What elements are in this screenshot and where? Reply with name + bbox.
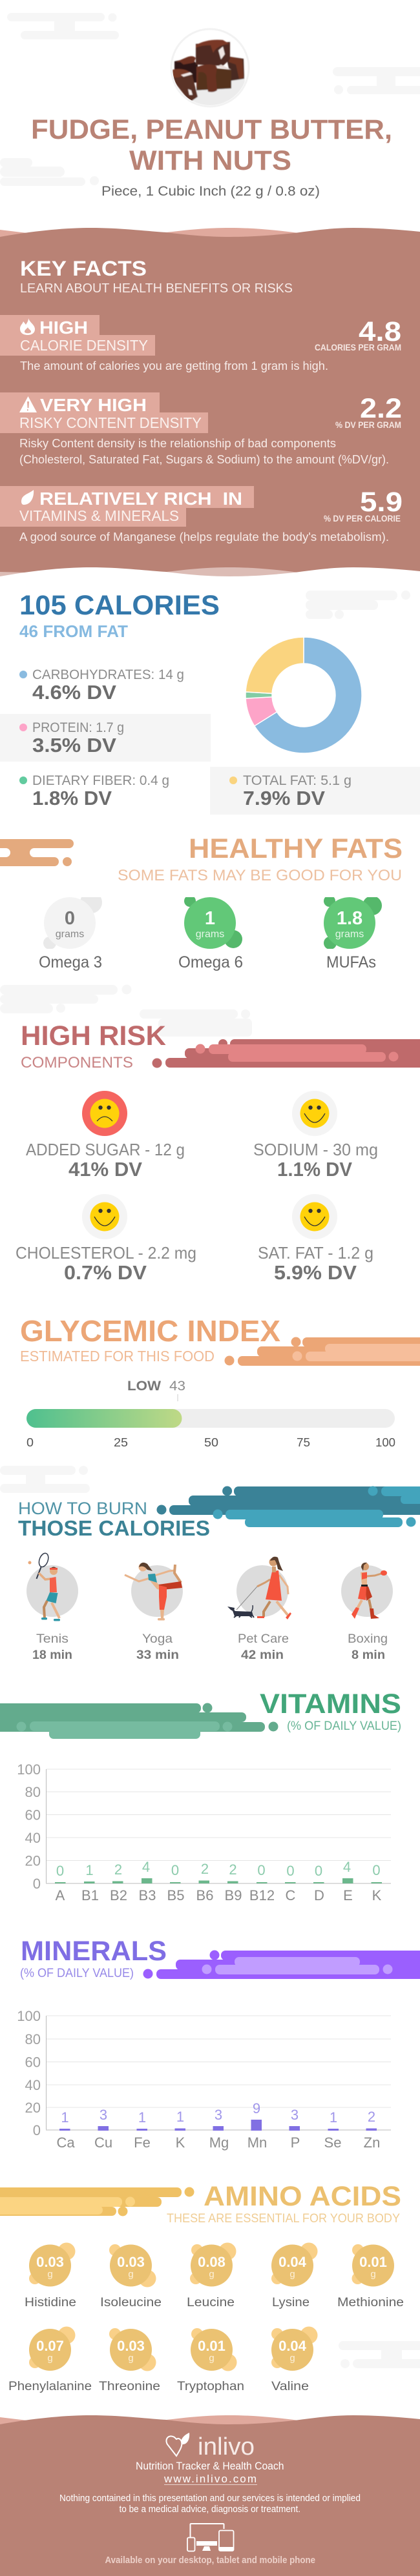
subheading: (% OF DAILY VALUE) [20,1967,134,1980]
activity: yoga: 33 min [136,1648,179,1662]
bar chart: vitamins: 0 [56,1863,64,1879]
amino: phenylalanine [8,2326,92,2393]
amino: valine: g [289,2353,295,2364]
heading: GLYCEMIC INDEX [20,1314,280,1348]
icon: flame [20,318,35,335]
heading: key facts: KEY FACTS [20,257,147,280]
icon: warning triangle [19,396,37,412]
title [31,114,392,176]
description: Risky Content density is the relationship of bad components [19,437,336,450]
bar chart: vitamins: B5 [167,1887,184,1903]
subheading: COMPONENTS [21,1054,133,1071]
bar chart: vitamins: B12 [249,1887,275,1903]
panel: high risk [16,1020,420,1284]
item: added sugar [26,1091,185,1181]
bar chart: vitamins: B9 [225,1887,242,1903]
activity: tennis [26,1552,78,1662]
activity: pet care [227,1557,291,1662]
amino: lysine: Lysine [272,2296,310,2309]
amino: lysine: 0.04 [278,2254,307,2270]
amino: tryptophan: 0.01 [198,2338,226,2354]
bar chart: vitamins: 0 [315,1863,322,1879]
omega 6: 1 [205,908,215,929]
legend: carbohydrates: CARBOHYDRATES: 14 g [32,667,184,682]
bar chart: minerals: Se [324,2135,341,2151]
label: relatively rich in: RELATIVELY RICH IN [39,489,242,509]
value: 4.8: 4.8 [359,316,401,347]
bar chart: vitamins: 0 [372,1862,381,1878]
heading line 1: HOW TO BURN [18,1499,147,1518]
omega 3: Omega 3 [39,953,102,971]
amino: phenylalanine: 0.07 [36,2338,64,2354]
item: cholesterol [16,1194,196,1284]
title: WITH NUTS [129,145,291,176]
bar chart: minerals: 3 [291,2107,299,2123]
heading line 2: THOSE CALORIES [18,1516,210,1540]
legend: carbohydrates [19,667,184,704]
amino: lysine [271,2242,318,2309]
website link: www.inlivo.com [163,2473,257,2485]
subheading: (% OF DAILY VALUE) [287,1719,401,1733]
legend: dietary fiber [19,773,169,809]
bar chart: minerals: 40 [25,2077,41,2093]
bar chart: vitamins: 2 [201,1861,209,1877]
disclaimer [59,2493,361,2515]
activity: boxing [341,1563,393,1662]
decor stripes [0,839,74,866]
bar chart: vitamins: 0 [286,1863,295,1879]
item: added sugar: ADDED SUGAR - 12 g [26,1140,185,1159]
omega 6: grams [196,929,224,940]
bar chart: minerals: 20 [25,2100,41,2116]
amino: histidine: 0.03 [36,2254,64,2270]
amino: tryptophan: g [209,2353,215,2364]
amino: isoleucine: 0.03 [117,2254,145,2270]
bar chart: minerals: 2 [368,2109,375,2125]
bar chart: vitamins: B1 [81,1887,99,1903]
bar chart: vitamins: 2 [114,1861,122,1878]
item: sodium: 1.1% DV [277,1158,352,1181]
heading: HIGH RISK [21,1020,166,1051]
bar chart: vitamins: 2 [229,1861,237,1878]
bar chart: vitamins: 0 [257,1862,266,1878]
bar chart: minerals: 1 [138,2109,146,2125]
heading: AMINO ACIDS [204,2181,401,2212]
item: cholesterol: CHOLESTEROL - 2.2 mg [16,1243,196,1263]
activity: pet care: Pet Care [238,1632,289,1646]
bar chart: vitamins: B2 [110,1887,127,1903]
availability note: Available on your desktop, tablet and mobile phone [105,2555,315,2566]
panel: vitamins [0,1689,401,1903]
amino: threonine: g [128,2353,134,2364]
bar chart: minerals: 100 [17,2008,41,2024]
bar chart: minerals: Ca [56,2135,75,2151]
bar chart: vitamins: 0 [33,1876,41,1892]
bar chart: minerals: P [291,2135,300,2151]
omega 6 [178,895,243,971]
legend: total fat [229,773,352,809]
item: saturated fat: 5.9% DV [274,1261,357,1284]
bar chart: vitamins: 1 [85,1862,94,1878]
bar chart: minerals: Mg [209,2135,229,2151]
wave: key facts bottom edge [0,567,420,584]
legend: protein [19,720,124,756]
omega 6: Omega 6 [178,953,243,971]
amino: isoleucine: g [128,2269,134,2280]
gauge bar [26,1409,395,1428]
activity: pet care: 42 min [241,1648,284,1662]
subheading: from fat: 46 FROM FAT [19,622,128,641]
activity: tennis: 18 min [32,1648,72,1662]
legend: protein: 3.5% DV [32,735,117,756]
decor stripes [225,1337,420,1366]
amino: histidine [25,2242,76,2309]
bar chart: minerals: K [176,2135,185,2151]
gauge axis: 0 [26,1436,34,1449]
omega 3: 0 [65,908,75,929]
tagline: Nutrition Tracker & Health Coach [136,2460,284,2472]
value: 5.9: 5.9 [360,487,403,518]
donut chart [246,637,362,753]
bar chart: minerals: Mn [247,2135,267,2151]
description: A good source of Manganese (helps regulate the body's metabolism). [19,531,389,543]
amino: isoleucine [100,2244,162,2309]
gauge axis: 75 [297,1436,310,1449]
bar chart: minerals: Cu [94,2135,112,2151]
amino: valine [271,2326,318,2393]
bar chart: vitamins: 4 [343,1859,351,1875]
decor stripes [152,1039,420,1068]
item: sodium [253,1091,378,1181]
bar chart: vitamins: A [56,1887,65,1903]
fact: calorie density [0,315,401,372]
heading: MINERALS [21,1936,167,1967]
legend: total fat: TOTAL FAT: 5.1 g [243,773,352,788]
mufas: 1.8 [337,908,362,929]
omega 3 [39,891,102,971]
mufas: MUFAs [326,953,376,971]
amino: histidine: Histidine [25,2296,76,2309]
panel: footer [0,2415,420,2576]
bar chart: minerals [17,2008,391,2151]
activity: boxing: 8 min [352,1648,385,1662]
bar chart: minerals: 3 [100,2107,107,2123]
amino: methionine: 0.01 [359,2254,387,2270]
amino: tryptophan: Tryptophan [177,2380,244,2393]
bar chart: minerals: 3 [215,2107,222,2123]
food photo: fudge brownies [171,29,249,110]
amino: phenylalanine: Phenylalanine [8,2380,92,2393]
gauge axis [26,1436,395,1449]
legend: dietary fiber: 1.8% DV [32,787,112,809]
gauge label: LOW [127,1379,161,1394]
panel: glycemic index [20,1314,420,1449]
label: very high: VERY HIGH [40,395,147,415]
serving size: Piece, 1 Cubic Inch (22 g / 0.8 oz) [101,184,320,199]
amino: valine: Valine [271,2380,309,2393]
legend: carbohydrates: 4.6% DV [32,682,117,704]
bar chart: vitamins: D [314,1887,324,1903]
icon: devices [187,2524,234,2551]
disclaimer: Nothing contained in this presentation and our services is intended or implied [59,2493,361,2504]
label: risky content density: RISKY CONTENT DENSITY [19,414,202,431]
gauge axis: 100 [375,1436,395,1449]
amino: methionine [337,2244,404,2309]
bar chart: minerals: 1 [176,2109,184,2125]
legend row backgrounds [0,714,420,815]
amino: methionine: Methionine [337,2296,404,2309]
label: high: HIGH [39,318,88,338]
value label: % DV PER CALORIE [324,514,401,523]
panel: amino acids [0,2181,404,2393]
decor stripes [0,1703,278,1739]
amino: lysine: g [289,2269,295,2280]
heading: VITAMINS [260,1689,401,1719]
bar chart: vitamins: 40 [25,1830,41,1846]
fact: vitamins and minerals [0,486,403,543]
amino: histidine: g [47,2269,53,2280]
description [19,437,389,466]
amino: tryptophan [177,2328,244,2393]
bar chart: vitamins: C [286,1887,296,1903]
amino: valine: 0.04 [278,2338,307,2354]
title: FUDGE, PEANUT BUTTER, [31,114,392,145]
bar chart: minerals: 60 [25,2054,41,2071]
label: calorie density: CALORIE DENSITY [20,337,148,354]
gauge axis: 25 [114,1436,128,1449]
panel: how to burn [18,1486,420,1662]
icon: leaf [21,490,34,505]
value label: CALORIES PER GRAM [315,343,401,352]
bar chart: minerals: Zn [364,2135,380,2151]
subheading: ESTIMATED FOR THIS FOOD [20,1348,215,1364]
bar chart: minerals: 9 [253,2100,260,2116]
amino: leucine [187,2242,236,2309]
decor stripes [0,2187,194,2216]
mufas [324,895,382,971]
value: 2.2: 2.2 [360,393,402,424]
bar chart: vitamins [17,1761,391,1903]
fact: risky content density [0,392,402,466]
bar chart: vitamins: E [343,1887,353,1903]
item: saturated fat: SAT. FAT - 1.2 g [258,1243,373,1263]
amino: leucine: 0.08 [198,2254,226,2270]
amino: threonine: 0.03 [117,2338,145,2354]
mufas: grams [335,929,364,940]
description: (Cholesterol, Saturated Fat, Sugars & Sodium) to the amount (%DV/gr). [19,453,389,466]
amino: threonine: Threonine [99,2380,160,2393]
bar chart: minerals: 80 [25,2031,41,2047]
panel: healthy fats [0,833,403,971]
heading: 105 calories: 105 CALORIES [19,590,220,621]
subheading: LEARN ABOUT HEALTH BENEFITS OR RISKS [20,281,293,296]
amino: threonine [99,2328,160,2393]
bar chart: minerals: 1 [61,2109,69,2125]
gauge axis: 50 [204,1436,218,1449]
activity: tennis: Tenis [36,1632,68,1646]
item: added sugar: 41% DV [68,1158,142,1181]
activity: yoga: Yoga [142,1632,173,1646]
panel: key facts [0,228,420,579]
amino: leucine: g [209,2269,215,2280]
omega 3: grams [56,929,84,940]
heading: HEALTHY FATS [189,833,403,864]
label: vitamins and minerals: VITAMINS & MINERALS [19,507,179,524]
bar chart: vitamins: 100 [17,1761,41,1778]
amino: isoleucine: Isoleucine [100,2296,162,2309]
amino: methionine: g [370,2269,376,2280]
item: saturated fat [258,1194,373,1284]
logo: heart and leaf [166,2433,189,2456]
subheading: THESE ARE ESSENTIAL FOR YOUR BODY [167,2212,400,2226]
item: cholesterol: 0.7% DV [64,1261,147,1284]
subheading: SOME FATS MAY BE GOOD FOR YOU [118,867,402,884]
disclaimer: to be a medical advice, diagnosis or treatment. [119,2504,300,2515]
bar chart: vitamins: 20 [25,1852,41,1869]
bar chart: vitamins: K [372,1887,382,1903]
activity: yoga [125,1563,183,1662]
amino: phenylalanine: g [47,2353,53,2364]
bar chart: vitamins: 0 [171,1862,179,1878]
bar chart: minerals: Fe [134,2135,151,2151]
bar chart: minerals: 1 [330,2109,337,2125]
logo: inlivo wordmark: inlivo [198,2433,255,2460]
legend: total fat: 7.9% DV [243,787,326,809]
amino: leucine: Leucine [187,2296,235,2309]
legend: dietary fiber: DIETARY FIBER: 0.4 g [32,773,169,788]
bar chart: vitamins: 4 [142,1859,150,1875]
description: The amount of calories you are getting from 1 gram is high. [20,360,328,372]
panel: minerals [17,1936,420,2151]
bar chart: vitamins: B6 [196,1887,213,1903]
value label: % DV PER GRAM [335,420,401,430]
panel: calories [0,590,420,815]
gauge label: 43 [169,1379,185,1394]
bar chart: vitamins: 80 [25,1784,41,1800]
item: sodium: SODIUM - 30 mg [253,1140,378,1159]
bar chart: minerals: 0 [33,2122,41,2138]
decor stripes [143,1951,420,1979]
legend: protein: PROTEIN: 1.7 g [32,720,124,735]
activity: boxing: Boxing [348,1632,388,1646]
bar chart: vitamins: 60 [25,1807,41,1823]
bar chart: vitamins: B3 [139,1887,156,1903]
decor stripes [156,1486,420,1527]
gauge label [127,1379,185,1401]
